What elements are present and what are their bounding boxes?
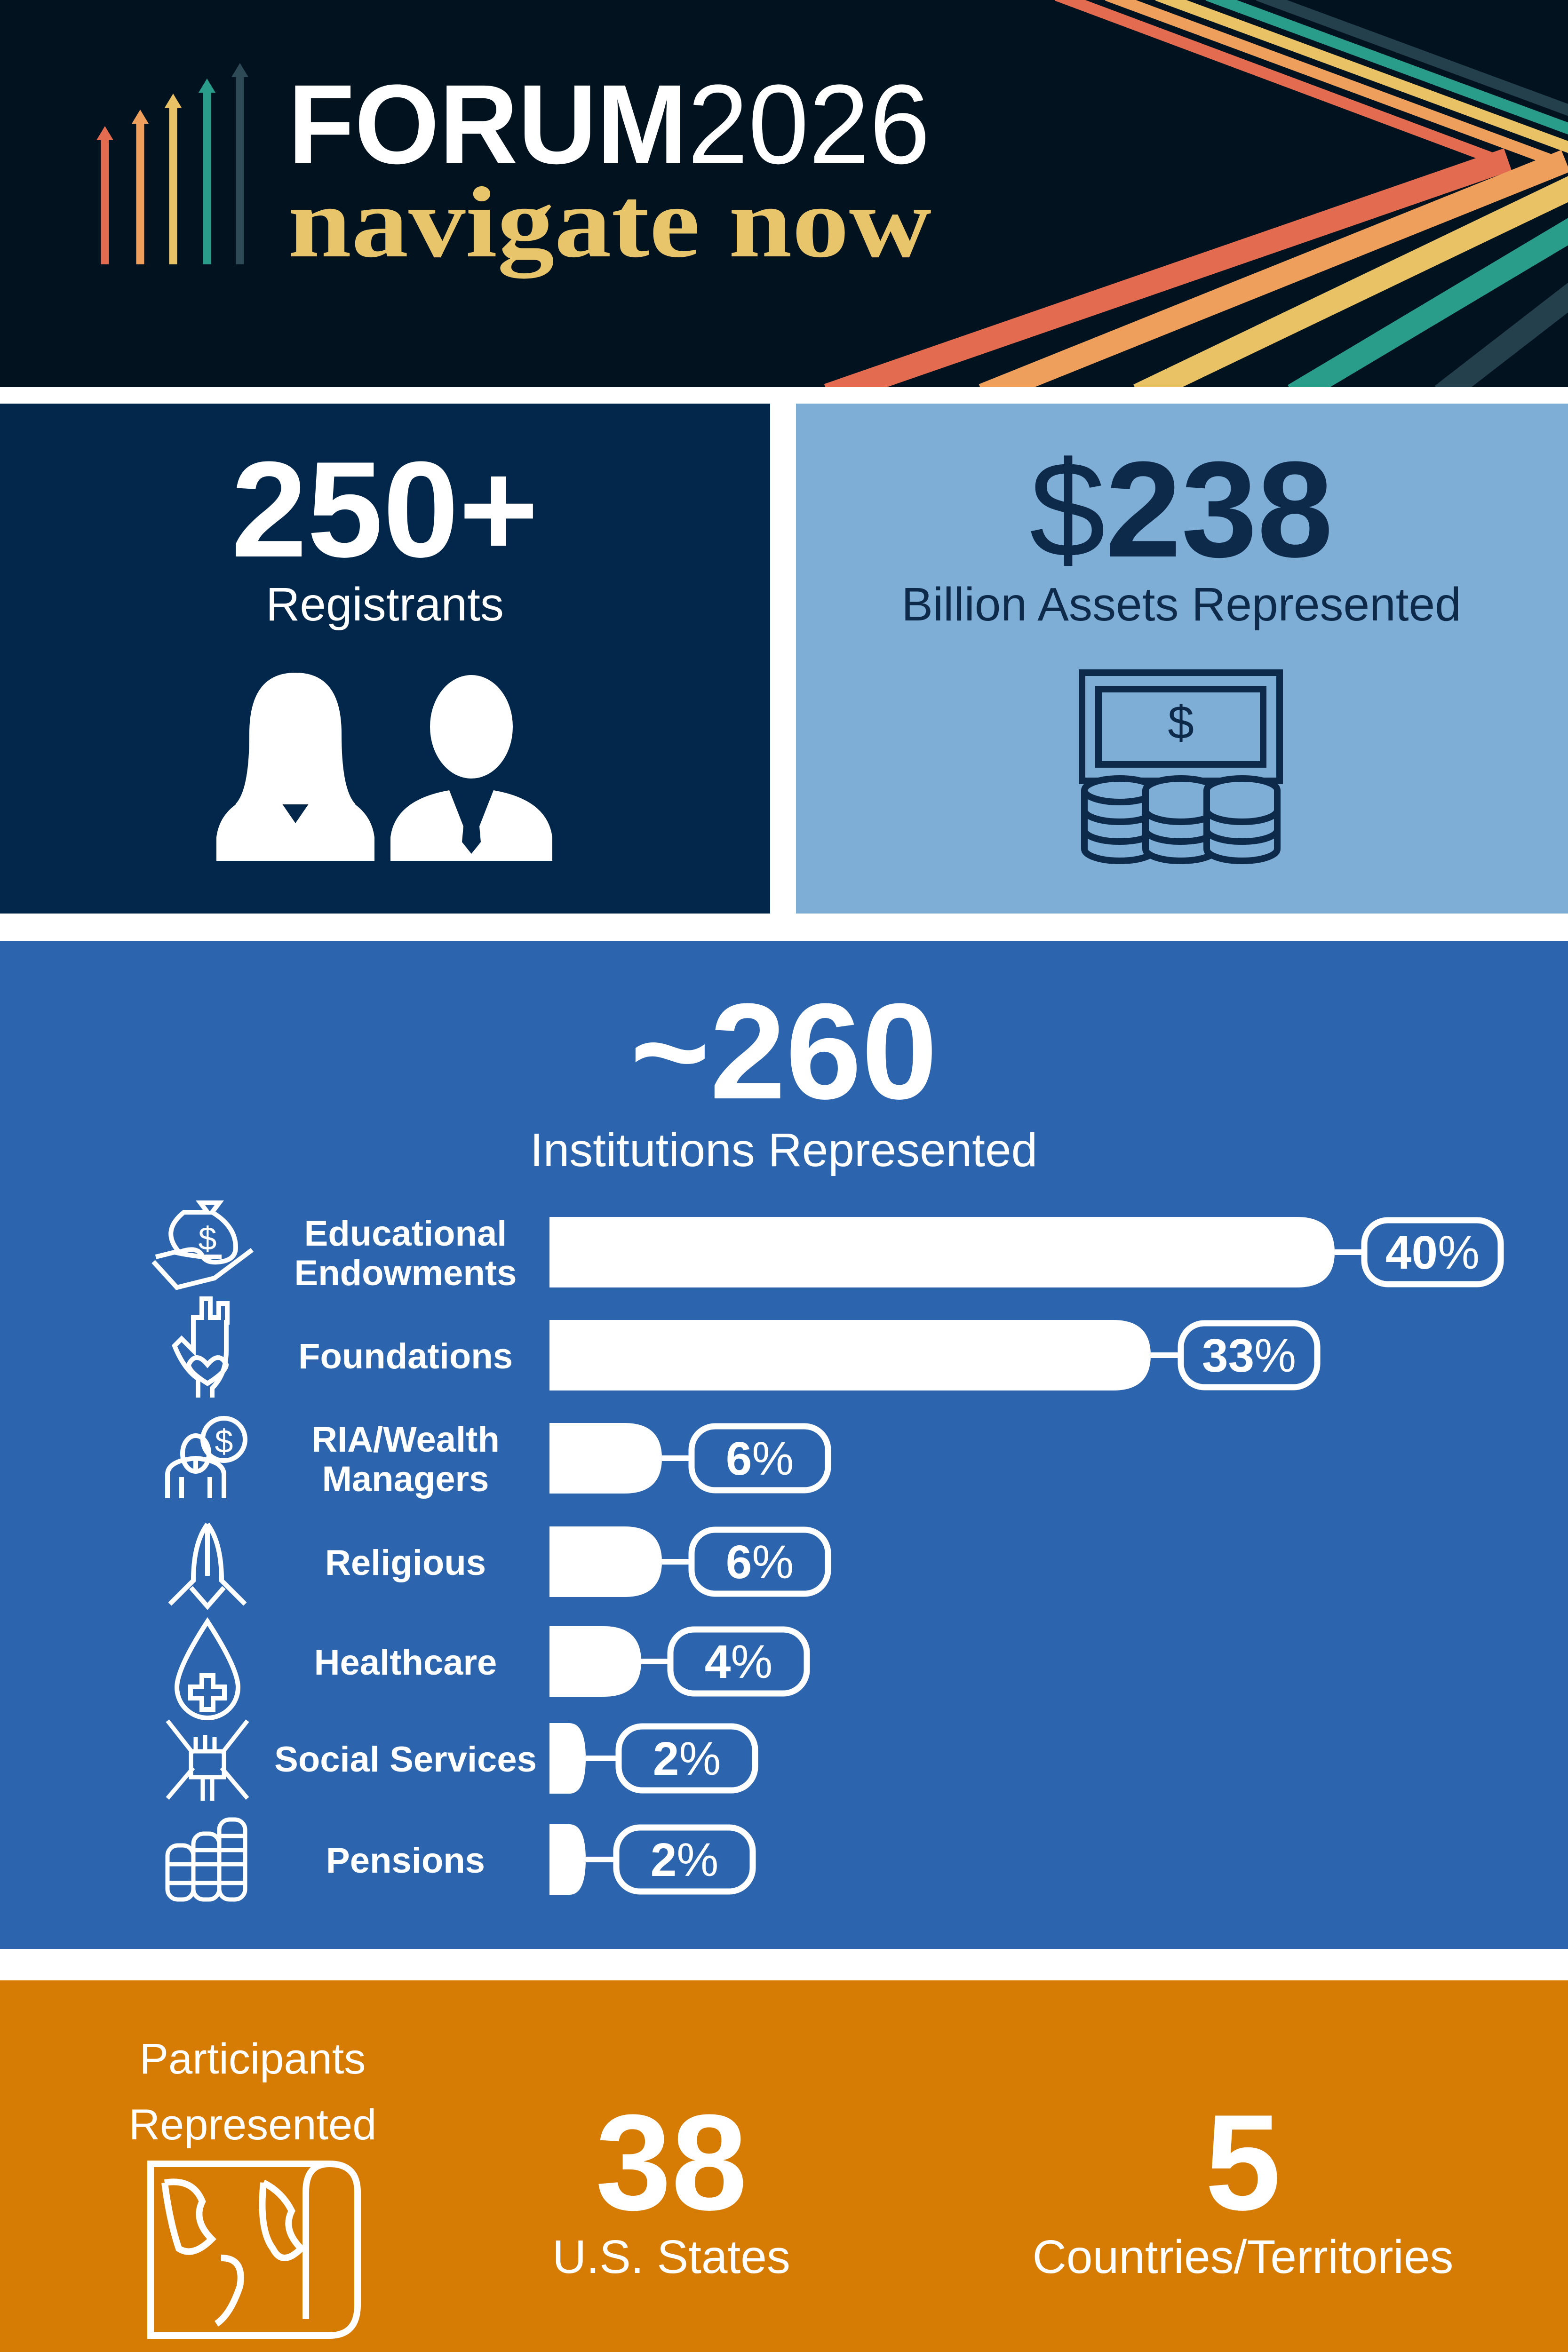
stat: 5 countries: 5 (1205, 2086, 1281, 2239)
row: religious: Religious (325, 1543, 486, 1583)
row: religious (170, 1524, 828, 1606)
icon: money and coins: $ (1168, 696, 1194, 749)
row: religious: 6% (726, 1536, 794, 1589)
stat: 38 states: 38 (596, 2086, 747, 2239)
panel: assets (796, 404, 1568, 914)
row: social services: 2% (653, 1732, 721, 1785)
row: RIA/Wealth managers: $ (215, 1423, 233, 1460)
label: billion assets: Billion Assets Represented (901, 578, 1461, 631)
row: RIA/Wealth managers: RIA/Wealth (311, 1420, 500, 1460)
row: healthcare: Healthcare (314, 1643, 497, 1683)
label: registrants: Registrants (266, 578, 504, 631)
panel: registrants (0, 404, 770, 914)
row: pensions (167, 1820, 753, 1899)
icon: people (216, 673, 552, 861)
icon: money and coins (1082, 673, 1280, 861)
stat: 250+: 250+ (231, 433, 539, 586)
panel: institutions (0, 941, 1568, 1949)
bar chart (153, 1203, 1501, 1899)
row: RIA/Wealth managers: 6% (726, 1432, 794, 1485)
row: educational endowments (153, 1203, 1501, 1293)
row: pensions: Pensions (326, 1841, 485, 1881)
row: healthcare: 4% (705, 1636, 772, 1688)
header banner (0, 0, 1568, 395)
row: social services (167, 1721, 755, 1801)
icon: map (151, 2164, 358, 2336)
row: healthcare (177, 1621, 807, 1718)
subtitle: navigate now (288, 166, 931, 278)
row: educational endowments: Endowments (294, 1253, 517, 1293)
panel: participants: U.S. States (552, 2231, 790, 2283)
row: foundations: Foundations (298, 1336, 513, 1376)
row: foundations (175, 1299, 1317, 1398)
title: FORUM2026 (288, 61, 930, 187)
row: educational endowments: Educational (304, 1214, 507, 1254)
row: educational endowments: 40% (1385, 1226, 1480, 1279)
logo: arrows icon (96, 63, 248, 264)
label: institutions represented: Institutions Represented (530, 1124, 1037, 1176)
row: social services: Social Services (274, 1740, 537, 1780)
row: RIA/Wealth managers (167, 1418, 828, 1499)
label: participants represented: Participants (140, 2035, 366, 2083)
stat: $238: $238 (1029, 433, 1333, 586)
row: pensions: 2% (651, 1834, 718, 1886)
stat: ~260: ~260 (630, 975, 938, 1128)
row: RIA/Wealth managers: Managers (322, 1459, 489, 1499)
panel: participants: Countries/Territories (1033, 2231, 1453, 2283)
panel: participants (0, 1980, 1568, 2352)
row: foundations: 33% (1202, 1329, 1296, 1382)
panel: participants: Represented (129, 2101, 376, 2149)
row: educational endowments: $ (199, 1220, 216, 1257)
